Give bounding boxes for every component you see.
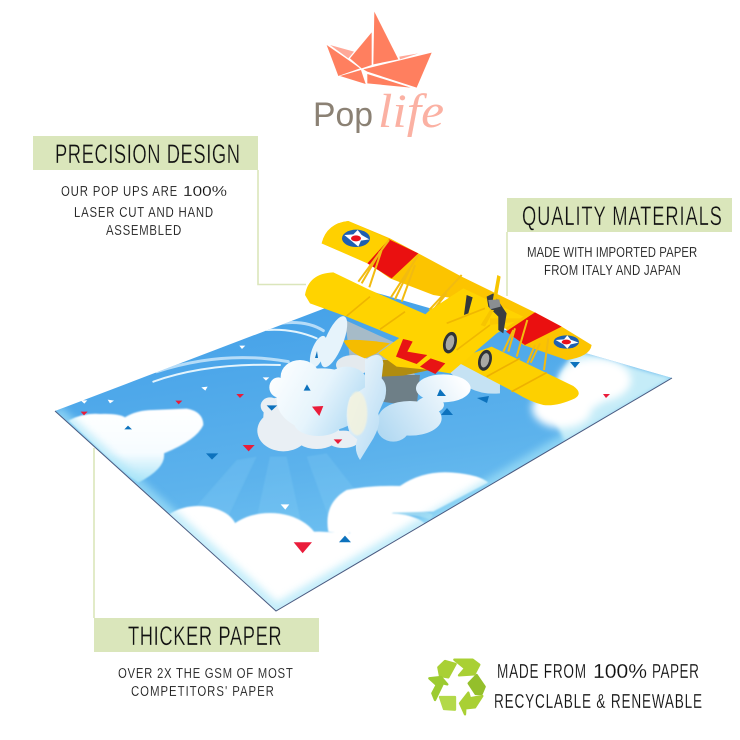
upper wing xyxy=(322,221,592,360)
right cloud xyxy=(532,350,672,442)
biplane xyxy=(305,221,592,405)
pop up card base xyxy=(55,291,672,617)
text: quality description: FROM ITALY AND JAPAN xyxy=(544,261,681,278)
text: thicker description: COMPETITORS' PAPER xyxy=(131,682,274,699)
dark shadow patch xyxy=(382,375,420,407)
icon: recycling arrows xyxy=(429,660,485,714)
logo: Poplife xyxy=(313,12,444,138)
shadow cloud xyxy=(257,397,360,451)
struts xyxy=(358,240,548,370)
rear pop up clouds xyxy=(257,355,500,451)
cyan edge fade xyxy=(55,378,672,611)
card edge xyxy=(55,378,672,611)
sky rays xyxy=(200,454,352,518)
label: quality materials xyxy=(507,198,732,278)
wordmark xyxy=(313,85,444,138)
left lower wing xyxy=(305,272,450,343)
roundel right xyxy=(554,335,579,349)
grey cloud behind xyxy=(336,355,371,375)
text: recyclable statement: PAPER xyxy=(652,660,699,683)
label: quality materials: QUALITY MATERIALS xyxy=(522,200,722,231)
text: precision description: LASER CUT AND HAND xyxy=(74,203,213,220)
label: thicker paper: THICKER PAPER xyxy=(128,620,282,651)
front cloud xyxy=(269,360,367,436)
left cloud xyxy=(68,409,203,483)
roundel left xyxy=(342,230,370,247)
wordmark: life xyxy=(378,85,444,138)
wordmark: Pop xyxy=(313,96,373,134)
icon: origami boat xyxy=(327,12,432,88)
wing cloud panels xyxy=(306,313,353,370)
text: thicker description: OVER 2X THE GSM OF MOST xyxy=(118,664,293,681)
front pop up clouds xyxy=(269,313,386,460)
text: precision description xyxy=(61,182,227,238)
grey backdrop under plane xyxy=(345,320,415,378)
text: precision description: OUR POP UPS ARE xyxy=(61,182,177,199)
rear right cloud xyxy=(377,374,471,442)
pale blue panel xyxy=(440,360,500,394)
text: recyclable statement: MADE FROM xyxy=(497,660,586,683)
text: thicker description xyxy=(118,664,293,699)
label: precision design: PRECISION DESIGN xyxy=(55,138,240,169)
text: precision description: 100% xyxy=(183,183,227,200)
confetti triangles xyxy=(81,344,351,553)
lower clouds xyxy=(160,472,488,617)
text: recyclable statement: RECYCLABLE & RENEWABLE xyxy=(494,690,702,713)
text: precision description: ASSEMBLED xyxy=(106,221,181,238)
connector lines xyxy=(94,170,507,618)
wheels xyxy=(441,330,494,372)
tail xyxy=(343,340,430,377)
text: recyclable statement xyxy=(494,660,702,713)
right lower wing xyxy=(453,347,579,405)
cream highlight xyxy=(347,391,367,435)
label: precision design xyxy=(33,136,258,238)
fuselage xyxy=(378,288,523,374)
confetti triangles right xyxy=(315,351,610,415)
sky streaks xyxy=(153,323,323,382)
text: quality description: MADE WITH IMPORTED PAPER xyxy=(527,243,697,260)
engine and propeller xyxy=(464,275,507,333)
label: thicker paper xyxy=(94,618,319,699)
text: quality description xyxy=(527,243,697,278)
text: recyclable statement: 100% xyxy=(593,661,647,683)
side cloud panel xyxy=(347,355,386,460)
